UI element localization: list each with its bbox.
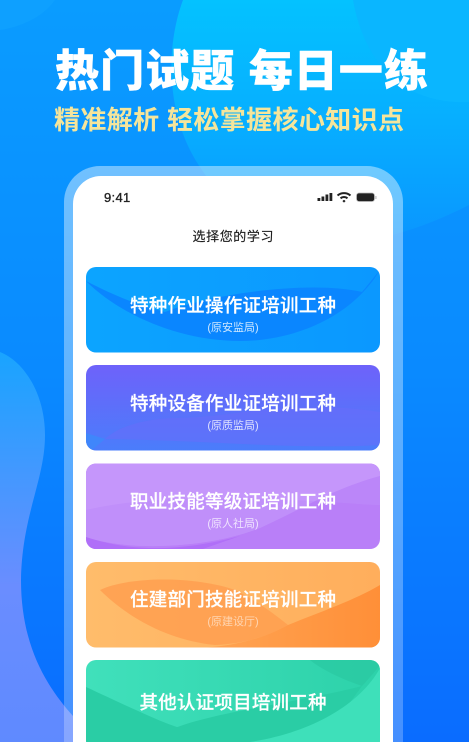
phone mockup bbox=[64, 166, 403, 742]
card: 特种设备作业证培训工种: 特种设备作业证培训工种 bbox=[130, 393, 336, 414]
card: 特种作业操作证培训工种 bbox=[86, 267, 380, 353]
subtitle: 精准解析 轻松掌握核心知识点 bbox=[54, 105, 404, 135]
decorative blob: left bbox=[0, 352, 73, 742]
card: 特种作业操作证培训工种: (原安监局) bbox=[207, 320, 259, 334]
card: 住建部门技能证培训工种 bbox=[86, 562, 380, 648]
title: 热门试题 每日一练 bbox=[55, 47, 428, 96]
phone screen bbox=[73, 176, 393, 742]
card: 职业技能等级证培训工种 bbox=[86, 463, 380, 550]
card: 职业技能等级证培训工种: 职业技能等级证培训工种 bbox=[130, 491, 336, 512]
phone frame bbox=[64, 166, 403, 742]
icon: battery bbox=[356, 193, 376, 202]
card: 住建部门技能证培训工种: (原建设厅) bbox=[207, 614, 259, 628]
icon: cellular signal bbox=[318, 193, 332, 201]
card: 特种设备作业证培训工种 bbox=[86, 365, 380, 451]
card: 其他认证项目培训工种 bbox=[86, 660, 380, 742]
card: 特种设备作业证培训工种: (原质监局) bbox=[207, 419, 259, 432]
status bar time: 9:41 bbox=[104, 190, 131, 205]
screen heading: 选择您的学习 bbox=[192, 229, 274, 244]
card: 住建部门技能证培训工种: 住建部门技能证培训工种 bbox=[130, 589, 336, 610]
card: 其他认证项目培训工种: 其他认证项目培训工种 bbox=[140, 692, 326, 713]
icon: wifi bbox=[338, 193, 350, 202]
card: 特种作业操作证培训工种: 特种作业操作证培训工种 bbox=[130, 295, 336, 316]
card: 职业技能等级证培训工种: (原人社局) bbox=[207, 516, 259, 530]
